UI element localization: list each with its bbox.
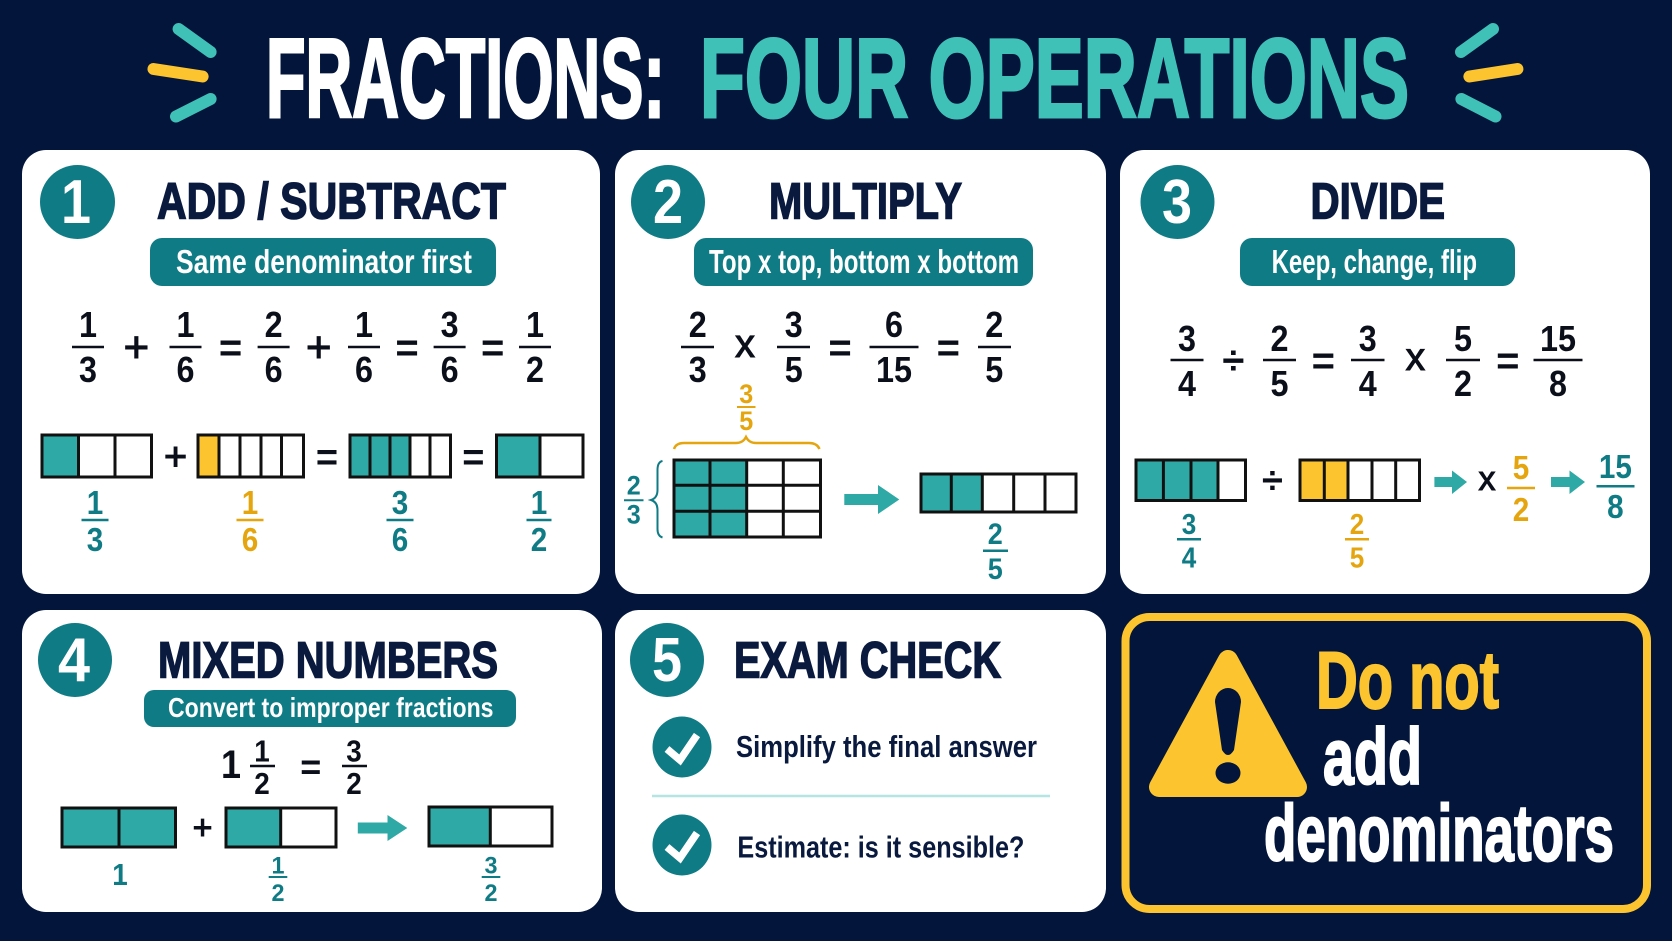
label: 2/3 left of grid: 2: [627, 470, 641, 500]
badge 3: [1140, 165, 1214, 239]
equation: 1/3 + 1/6 = 2/6 + 1/6 = 3/6 = 1/2: 1: [355, 304, 373, 345]
badge 1: 1: [61, 168, 91, 237]
badge 5: [630, 623, 704, 697]
fraction: 15/8 teal: 8: [1607, 488, 1624, 525]
equation: 3/4 ÷ 2/5 = 3/4 x 5/2 = 15/8: 2: [1270, 318, 1288, 359]
equation: 1/3 + 1/6 = 2/6 + 1/6 = 3/6 = 1/2: 6: [355, 349, 373, 390]
equation: 1 1/2 = 3/2: =: [300, 746, 321, 787]
equation: 3/4 ÷ 2/5 = 3/4 x 5/2 = 15/8: =: [1496, 339, 1519, 383]
arrow: [358, 815, 407, 841]
equation: 3/4 ÷ 2/5 = 3/4 x 5/2 = 15/8: [1170, 318, 1582, 404]
label: 1/6: [236, 484, 264, 558]
label: 3/6: 3: [392, 484, 408, 521]
equation: 2/3 x 3/5 = 6/15 = 2/5: 5: [785, 349, 803, 390]
equation: 1/3 + 1/6 = 2/6 + 1/6 = 3/6 = 1/2: 2: [265, 304, 283, 345]
heading: exam check: EXAM CHECK: [734, 632, 1001, 688]
title: FRACTIONS:: [266, 16, 665, 141]
equals: =: [462, 437, 484, 479]
pill: convert to improper fractions: Convert to improper fractions: [168, 692, 494, 723]
label: 1/3: [82, 484, 108, 558]
plus: +: [193, 809, 212, 847]
equation: 1/3 + 1/6 = 2/6 + 1/6 = 3/6 = 1/2: =: [219, 326, 242, 370]
badge 5: 5: [652, 626, 682, 695]
label: 3/6: [386, 484, 414, 558]
equation: 1 1/2 = 3/2: [221, 734, 367, 801]
label: 2/5 gold: 2: [1350, 509, 1364, 541]
equation: 1 1/2 = 3/2: 1: [254, 734, 270, 769]
equation: 3/4 ÷ 2/5 = 3/4 x 5/2 = 15/8: ÷: [1222, 339, 1244, 383]
equation: 1/3 + 1/6 = 2/6 + 1/6 = 3/6 = 1/2: 3: [441, 304, 459, 345]
badge 3: 3: [1162, 168, 1192, 237]
equation: 3/4 ÷ 2/5 = 3/4 x 5/2 = 15/8: x: [1406, 336, 1426, 379]
label: 2/5 gold: [1345, 509, 1369, 575]
equals: =: [316, 437, 338, 479]
area grid: 2/3 x 3/5: [674, 460, 820, 537]
icon: left sparks: [154, 29, 211, 116]
fraction: 15/8 teal: 15: [1599, 448, 1632, 485]
equation: 3/4 ÷ 2/5 = 3/4 x 5/2 = 15/8: =: [1312, 339, 1335, 383]
fraction: 5/2 gold: 5: [1513, 449, 1529, 486]
equation: 1 1/2 = 3/2: 1: [221, 743, 241, 787]
bar model: 3/2: [429, 807, 552, 846]
pill: keep, change, flip: Keep, change, flip: [1272, 243, 1477, 280]
label: 2/5: 5: [988, 553, 1003, 586]
text: add: add: [1323, 712, 1422, 801]
equation: 1/3 + 1/6 = 2/6 + 1/6 = 3/6 = 1/2: 1: [176, 304, 194, 345]
badge 2: 2: [653, 168, 683, 237]
equation: 1/3 + 1/6 = 2/6 + 1/6 = 3/6 = 1/2: 2: [526, 349, 544, 390]
heading: multiply: MULTIPLY: [769, 172, 962, 230]
label: 1/2: 2: [531, 521, 547, 558]
badge 4: 4: [58, 626, 90, 695]
label: 3/2: [482, 852, 500, 907]
bar model: 1/2: [226, 808, 336, 847]
arrow: [844, 485, 899, 514]
equation: 1/3 + 1/6 = 2/6 + 1/6 = 3/6 = 1/2: [72, 304, 551, 390]
heading: add / subtract: ADD / SUBTRACT: [157, 172, 506, 230]
equation: 1/3 + 1/6 = 2/6 + 1/6 = 3/6 = 1/2: +: [306, 323, 332, 372]
equation: 3/4 ÷ 2/5 = 3/4 x 5/2 = 15/8: 8: [1549, 363, 1567, 404]
text: estimate: Estimate: is it sensible?: [737, 830, 1024, 865]
equation: 1 1/2 = 3/2: 2: [254, 766, 270, 801]
equation: 2/3 x 3/5 = 6/15 = 2/5: x: [735, 322, 755, 366]
equation: 1/3 + 1/6 = 2/6 + 1/6 = 3/6 = 1/2: 6: [176, 349, 194, 390]
equation: 1/3 + 1/6 = 2/6 + 1/6 = 3/6 = 1/2: 1: [526, 304, 544, 345]
label: 1: 1: [112, 857, 128, 892]
text: do not: Do not: [1316, 636, 1499, 726]
icon: check 2: [652, 814, 712, 876]
pill: top x top, bottom x bottom: Top x top, bottom x bottom: [709, 243, 1019, 280]
equation: 3/4 ÷ 2/5 = 3/4 x 5/2 = 15/8: 3: [1178, 318, 1196, 359]
label: 2/5: 2: [988, 518, 1003, 551]
label: 1/3: 3: [87, 521, 103, 558]
label: 3/4: 3: [1182, 509, 1196, 541]
equation: 3/4 ÷ 2/5 = 3/4 x 5/2 = 15/8: 4: [1359, 363, 1377, 404]
label: 1/2: [526, 484, 552, 558]
bar model: 1/3: [42, 435, 152, 477]
icon: check 1: [652, 716, 712, 778]
equation: 1/3 + 1/6 = 2/6 + 1/6 = 3/6 = 1/2: +: [124, 323, 149, 372]
equation: 1/3 + 1/6 = 2/6 + 1/6 = 3/6 = 1/2: 1: [79, 304, 97, 345]
equation: 2/3 x 3/5 = 6/15 = 2/5: [681, 304, 1011, 390]
badge 4: [38, 623, 112, 697]
label: 3/5 above grid: 3: [739, 379, 753, 409]
label: 2/3 left of grid: [624, 470, 644, 530]
equation: 1/3 + 1/6 = 2/6 + 1/6 = 3/6 = 1/2: 6: [265, 349, 283, 390]
label: 3/4: 4: [1182, 543, 1196, 575]
equation: 3/4 ÷ 2/5 = 3/4 x 5/2 = 15/8: 5: [1270, 363, 1288, 404]
equation: 1/3 + 1/6 = 2/6 + 1/6 = 3/6 = 1/2: 3: [79, 349, 97, 390]
bar model: 3/6: [350, 435, 450, 477]
equation: 2/3 x 3/5 = 6/15 = 2/5: 3: [785, 304, 803, 345]
equation: 3/4 ÷ 2/5 = 3/4 x 5/2 = 15/8: 3: [1359, 318, 1377, 359]
panel: mixed numbers: [22, 610, 602, 912]
badge 1: [40, 165, 115, 239]
label: 1/2: 1: [531, 484, 547, 521]
multiply sign: x: [1478, 460, 1496, 498]
icon: warning triangle: [1159, 660, 1297, 787]
bar model: 2/5: [921, 474, 1076, 512]
panel: add / subtract: [22, 150, 600, 594]
equation: 3/4 ÷ 2/5 = 3/4 x 5/2 = 15/8: 4: [1178, 363, 1196, 404]
label: 1/2: 2: [272, 880, 284, 907]
label: 2/5 gold: 5: [1350, 543, 1364, 575]
title: [266, 16, 1409, 141]
equation: 2/3 x 3/5 = 6/15 = 2/5: 15: [876, 349, 912, 390]
text: simplify the final answer: Simplify the final answer: [736, 729, 1037, 764]
equation: 2/3 x 3/5 = 6/15 = 2/5: =: [828, 326, 852, 370]
label: 1/3: 1: [87, 484, 103, 521]
equation: 3/4 ÷ 2/5 = 3/4 x 5/2 = 15/8: 2: [1454, 363, 1472, 404]
plus: +: [164, 435, 187, 479]
panel: warning: [1126, 617, 1647, 909]
pill: same denominator first: [150, 238, 496, 286]
arrow: [1551, 470, 1585, 494]
equation: 1/3 + 1/6 = 2/6 + 1/6 = 3/6 = 1/2: =: [481, 326, 504, 370]
equation: 1 1/2 = 3/2: 2: [346, 766, 362, 801]
bar model: 1/6: [198, 435, 304, 477]
label: 2/3 left of grid: 3: [627, 500, 641, 530]
label: 3/5 above grid: 5: [739, 406, 753, 436]
label: 3/5 above grid: [737, 379, 756, 436]
bar model: 3/4: [1136, 460, 1246, 500]
fraction: 15/8 teal: [1596, 448, 1634, 525]
icon: right sparks: [1461, 29, 1517, 116]
equation: 1 1/2 = 3/2: 3: [346, 734, 362, 769]
bar model: 2/5 yellow: [1300, 460, 1420, 500]
label: 1/6: 1: [242, 484, 258, 521]
divide sign: ÷: [1262, 460, 1283, 502]
equation: 2/3 x 3/5 = 6/15 = 2/5: 6: [885, 304, 903, 345]
label: 3/2: 2: [484, 880, 498, 907]
equation: 2/3 x 3/5 = 6/15 = 2/5: 3: [689, 349, 707, 390]
equation: 2/3 x 3/5 = 6/15 = 2/5: 2: [689, 304, 707, 345]
fraction: 5/2 gold: [1507, 449, 1535, 528]
equation: 1/3 + 1/6 = 2/6 + 1/6 = 3/6 = 1/2: =: [395, 326, 419, 370]
bar model: 1 whole: [62, 808, 176, 847]
pill: keep, change, flip: [1240, 238, 1515, 286]
badge 2: [631, 165, 705, 239]
label: 1/2: [269, 852, 287, 907]
label: 3/6: 6: [392, 521, 408, 558]
brace: left teal: [651, 461, 662, 538]
fraction: 5/2 gold: 2: [1513, 491, 1529, 528]
pill: top x top, bottom x bottom: [694, 238, 1033, 286]
label: 2/5: [983, 518, 1008, 586]
equation: 1/3 + 1/6 = 2/6 + 1/6 = 3/6 = 1/2: 6: [441, 349, 459, 390]
brace: top gold: [674, 437, 820, 449]
equation: 2/3 x 3/5 = 6/15 = 2/5: 5: [985, 349, 1003, 390]
pill: same denominator first: Same denominator first: [176, 243, 472, 280]
heading: divide: DIVIDE: [1310, 172, 1445, 230]
panel: divide: [1120, 150, 1650, 594]
label: 1/6: 6: [242, 521, 258, 558]
label: 1/2: 1: [272, 852, 284, 880]
panel: multiply: [615, 150, 1106, 594]
heading: mixed numbers: MIXED NUMBERS: [158, 632, 498, 688]
bar model: 1/2: [496, 435, 583, 477]
equation: 3/4 ÷ 2/5 = 3/4 x 5/2 = 15/8: 5: [1454, 318, 1472, 359]
label: 3/4: [1177, 509, 1201, 575]
panel: exam check: [615, 610, 1106, 912]
equation: 3/4 ÷ 2/5 = 3/4 x 5/2 = 15/8: 15: [1540, 318, 1576, 359]
equation: 2/3 x 3/5 = 6/15 = 2/5: =: [937, 326, 960, 370]
equation: 2/3 x 3/5 = 6/15 = 2/5: 2: [985, 304, 1003, 345]
label: 3/2: 3: [484, 852, 498, 880]
arrow: [1434, 470, 1467, 494]
